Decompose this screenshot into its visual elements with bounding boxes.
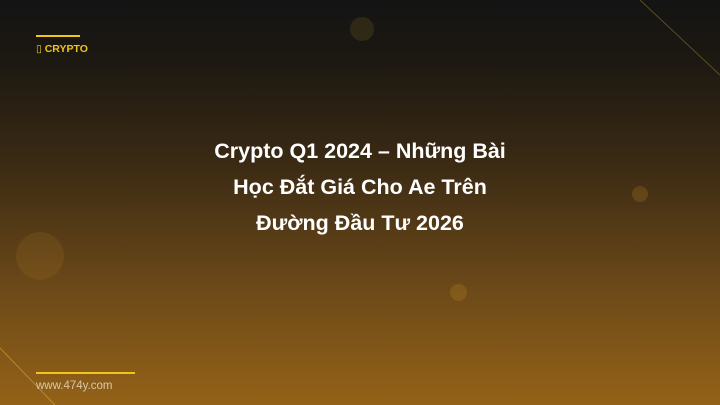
top accent line	[36, 35, 80, 37]
title: Đường Đầu Tư 2026	[256, 211, 464, 235]
bottom accent line	[36, 372, 135, 374]
category label: ▯ CRYPTO	[36, 43, 88, 55]
title: Học Đắt Giá Cho Ae Trên	[233, 175, 487, 199]
title: Crypto Q1 2024 – Những Bài	[214, 139, 506, 163]
title	[214, 139, 506, 235]
website: www.474y.com	[36, 380, 112, 392]
